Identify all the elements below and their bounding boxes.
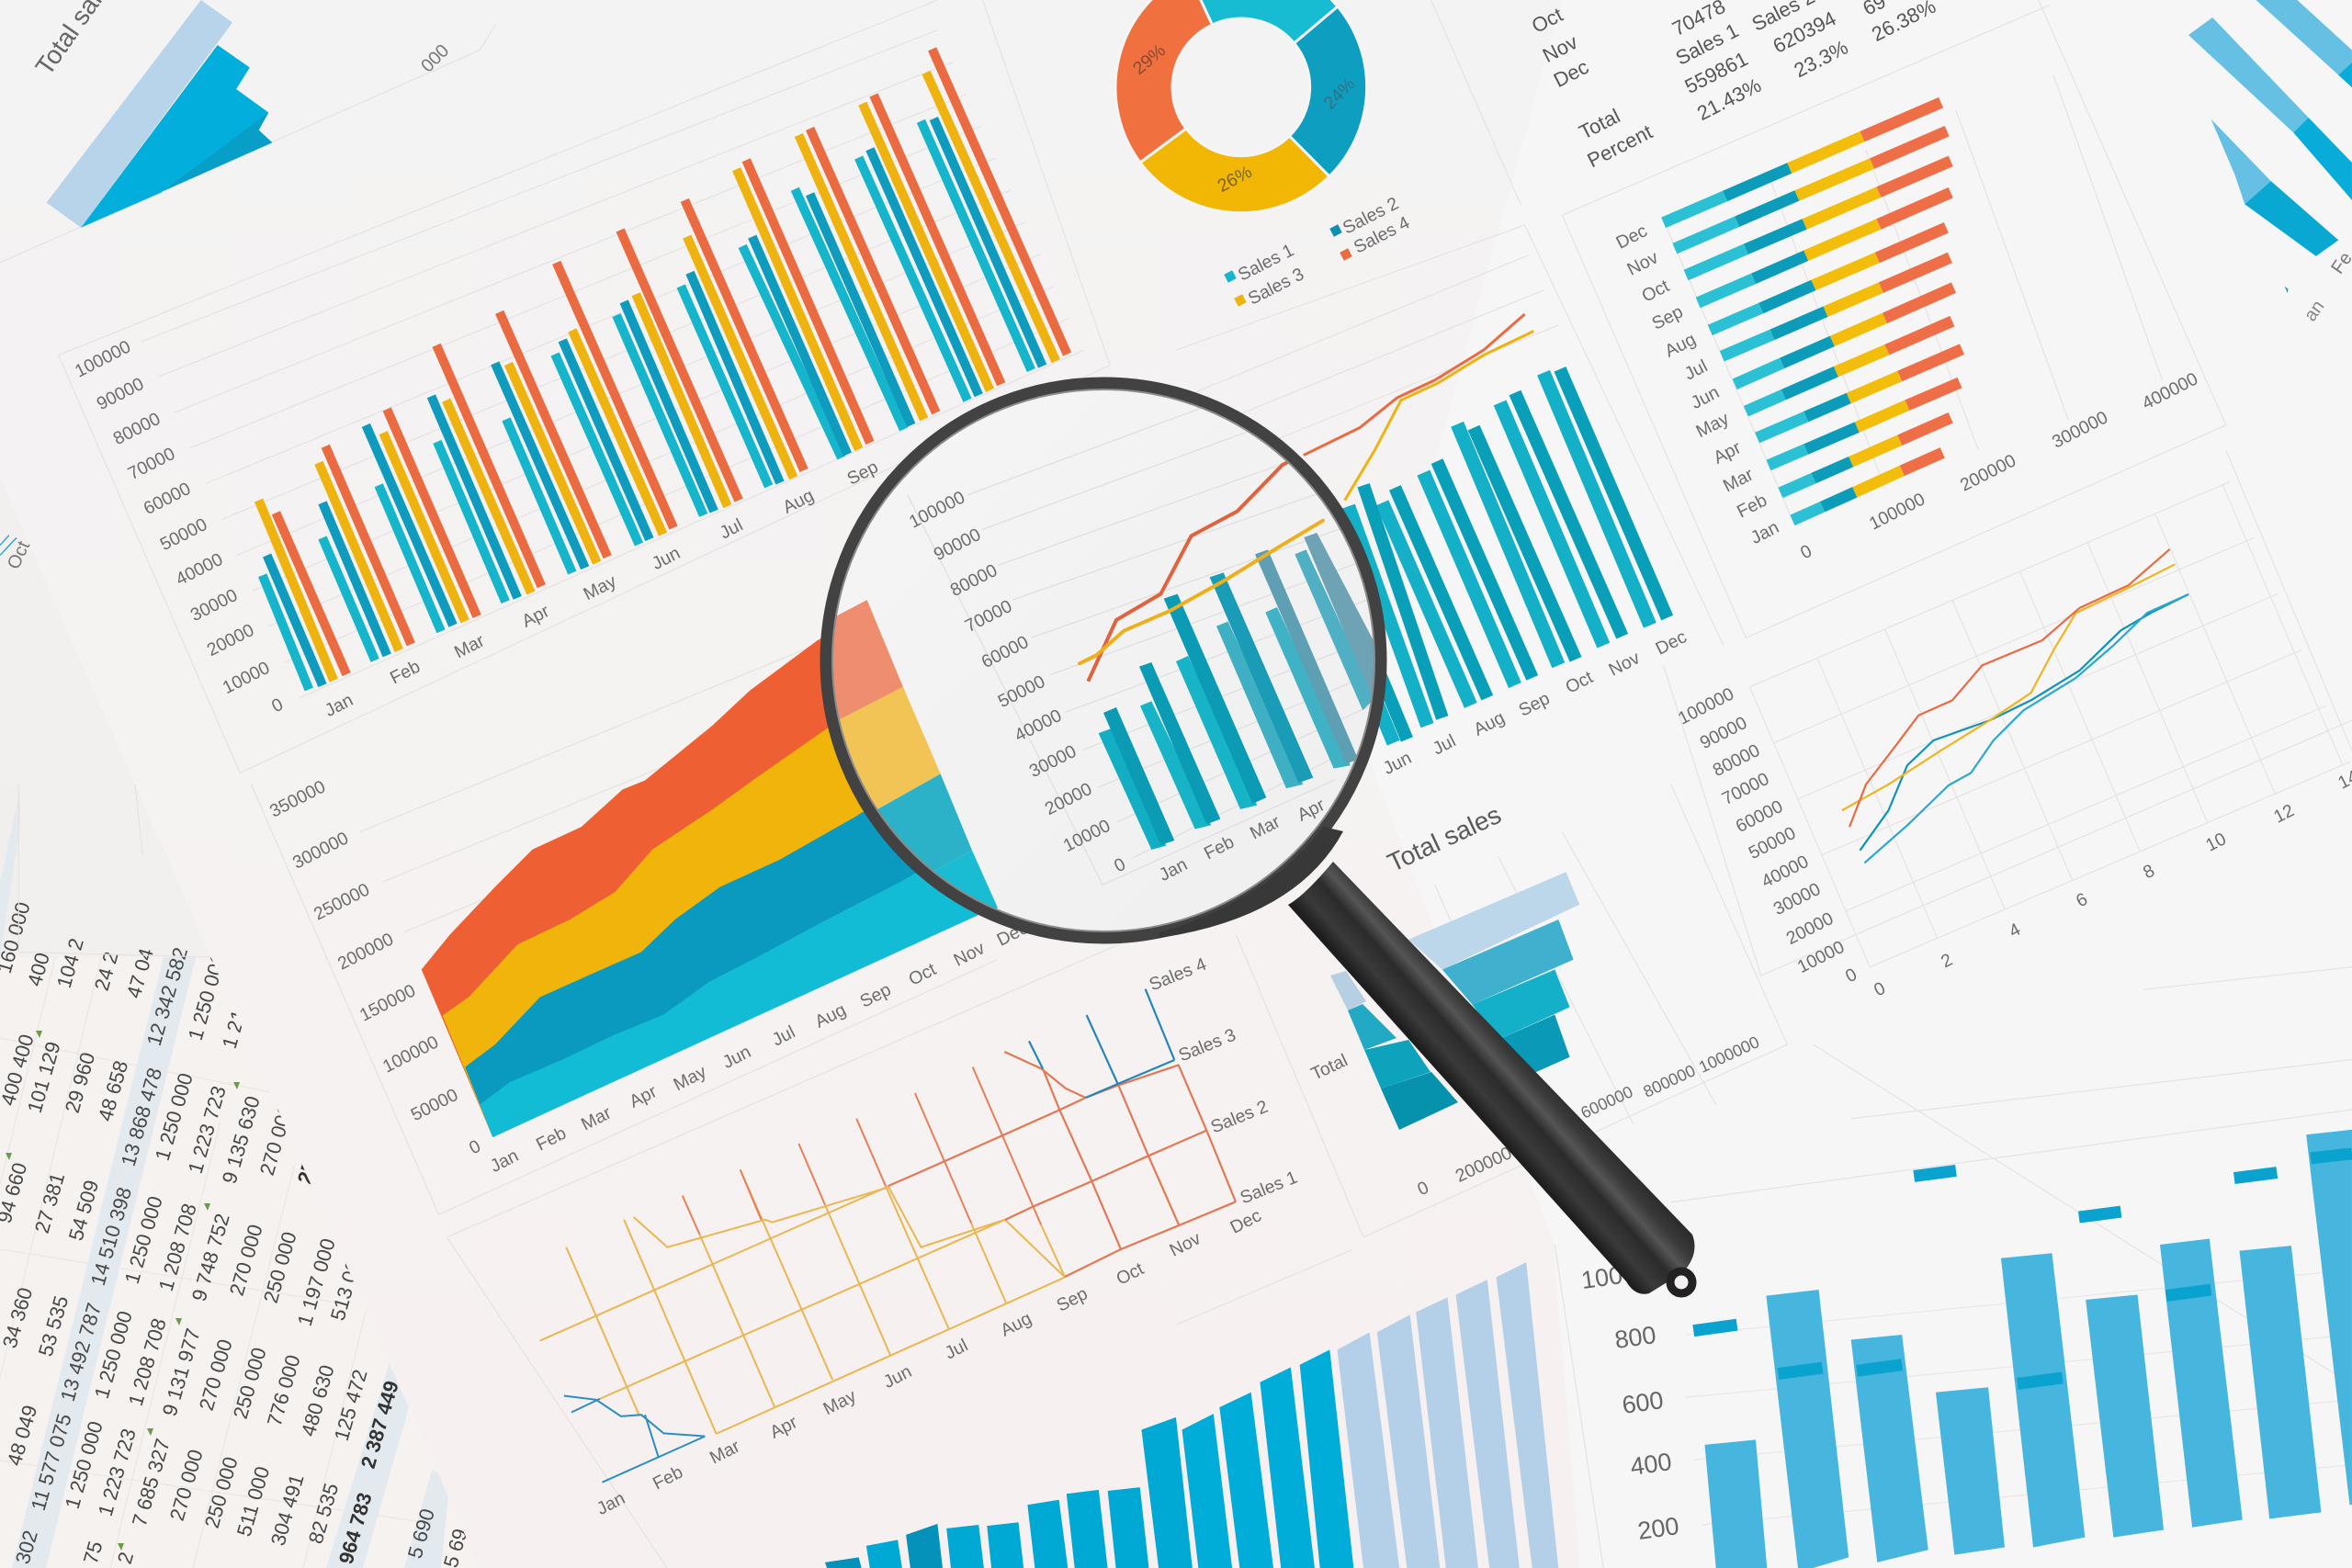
- chart: total sales horizontal bars: 200000: [1453, 1143, 1515, 1187]
- chart: line chart with numeric x axis: 40000: [1758, 852, 1812, 892]
- chart: line chart with numeric x axis: 100000: [1675, 683, 1737, 729]
- spreadsheet numbers: 9 748 752: [187, 1211, 234, 1303]
- chart: grid line chart sales 1-4: [540, 954, 1300, 1519]
- axis labels: Aug: [780, 485, 817, 518]
- chart axis fragment: 000: [417, 40, 453, 76]
- axis labels: 50000: [157, 514, 210, 555]
- chart: stacked area: Dec: [994, 918, 1032, 951]
- chart: grid line chart sales 1-4: Jul: [942, 1336, 971, 1363]
- spreadsheet numbers: 14 510 398: [86, 1185, 136, 1288]
- spreadsheet numbers: 75: [79, 1539, 107, 1566]
- axis labels: 70000: [125, 444, 178, 484]
- chart: stacked horizontal bars: Jul: [1681, 356, 1711, 384]
- handle collar: [1159, 827, 1343, 938]
- spreadsheet numbers: 1 223 723: [184, 1083, 231, 1176]
- axis labels: 20000: [204, 620, 257, 660]
- table: totals: Nov: [1539, 30, 1581, 67]
- table: totals: Total: [1576, 104, 1623, 144]
- lens axis labels: 100000: [906, 487, 968, 533]
- chart: line chart with numeric x axis: 80000: [1710, 740, 1763, 781]
- spreadsheet numbers: 1 250 000: [151, 1070, 198, 1163]
- panel: small partial chart on left sheet: [0, 536, 17, 556]
- table: totals: Percent: [1584, 120, 1656, 172]
- icon: magnifying glass: [808, 367, 1694, 1294]
- y axis labels: 600: [1621, 1386, 1665, 1419]
- lens axis labels: 20000: [1042, 779, 1095, 819]
- table: totals: Sales 1: [1672, 18, 1742, 70]
- legend: sales series: Sales 2: [1340, 193, 1402, 239]
- text: Oct label on left chart: Oct: [4, 537, 34, 572]
- chart: line chart with numeric x axis: 90000: [1697, 713, 1750, 753]
- chart: grid line chart sales 1-4: Nov: [1167, 1228, 1204, 1261]
- chart: stacked area: 150000: [356, 980, 419, 1026]
- chart: bars with lines (outside lens): Sep: [1516, 688, 1554, 721]
- axis labels: 40000: [173, 549, 226, 590]
- spreadsheet numbers: 270 000: [225, 1222, 267, 1298]
- lens view: [833, 397, 1374, 922]
- chart: top-left total sales fragment: [30, 0, 272, 228]
- chart: total sales horizontal bars: 600000: [1578, 1082, 1635, 1122]
- axis labels: Jan: [322, 690, 356, 721]
- target markers: [1693, 1154, 2352, 1383]
- chart: grid line chart sales 1-4: Sales 4: [1147, 954, 1209, 995]
- axis labels: Jun: [649, 543, 684, 574]
- spreadsheet numbers: 11 577 075: [27, 1411, 76, 1513]
- spreadsheet numbers: 400: [23, 950, 54, 988]
- chart: grid line chart sales 1-4: Feb: [650, 1462, 686, 1494]
- spreadsheet numbers: 48 049: [3, 1403, 41, 1468]
- y axis labels: 1000: [1579, 1259, 1638, 1294]
- spreadsheet numbers: 1 250 000: [120, 1193, 167, 1286]
- axis labels: Apr: [518, 601, 553, 632]
- chart: stacked area: Mar: [578, 1102, 615, 1134]
- spreadsheet numbers: 29 960: [61, 1050, 99, 1115]
- chart: line chart with numeric x axis: 8: [2140, 861, 2158, 883]
- spreadsheet numbers: 776 000: [263, 1352, 305, 1428]
- donut labels: 26%: [1215, 162, 1255, 197]
- spreadsheet numbers: 1 250 000: [184, 950, 231, 1043]
- chart: bars with lines (outside lens): Oct: [1562, 667, 1597, 698]
- spreadsheet numbers: 270 000: [255, 1101, 298, 1178]
- chart: total sales horizontal bars: 1000000: [1696, 1032, 1762, 1077]
- chart: total sales horizontal bars: 0: [1414, 1178, 1432, 1200]
- y axis labels: 200: [1636, 1512, 1680, 1545]
- lens area chart: [833, 600, 998, 908]
- chart: stacked horizontal bars: Oct: [1638, 276, 1673, 307]
- lens axis labels: Jan: [1156, 854, 1191, 886]
- axis labels: 30000: [187, 585, 241, 626]
- axis labels: 10000: [220, 658, 273, 698]
- spreadsheet numbers: 13 492 787: [56, 1301, 106, 1404]
- spreadsheet numbers: 304 491: [266, 1472, 309, 1548]
- legend: sales series: Sales 3: [1245, 264, 1307, 310]
- chart: line chart with numeric x axis: 2: [1938, 950, 1956, 972]
- chart: stacked area: 250000: [311, 879, 373, 925]
- panel: spreadsheet sheet: [0, 784, 480, 1568]
- chart: stacked area: 300000: [289, 828, 352, 874]
- axis labels: 100000: [72, 336, 134, 382]
- table: totals: Oct: [1528, 3, 1566, 38]
- handle shaft: [1288, 862, 1694, 1294]
- axis labels: Jul: [717, 515, 746, 543]
- axis labels: May: [581, 571, 620, 604]
- y axis labels: [1579, 1259, 1680, 1545]
- spreadsheet numbers: 101 129: [23, 1039, 65, 1115]
- spreadsheet numbers: 1 250 000: [61, 1418, 107, 1511]
- legend: sales series: [1224, 193, 1413, 310]
- chart: bottom right blue bars with markers: [1579, 1130, 2352, 1568]
- chart: bars with lines (outside lens): [1304, 314, 1690, 779]
- spreadsheet numbers: 5 690: [403, 1506, 439, 1561]
- lens axis labels: 10000: [1060, 816, 1114, 856]
- spreadsheet numbers: 964 783: [334, 1490, 377, 1566]
- chart: donut: [1115, 0, 1367, 213]
- spreadsheet numbers: 9 131 977: [158, 1325, 205, 1418]
- spreadsheet numbers: 270 000: [165, 1447, 208, 1523]
- chart: line chart with numeric x axis: 30000: [1770, 879, 1824, 919]
- spreadsheet numbers: 104 2: [52, 936, 88, 990]
- spreadsheet numbers: 24 2: [90, 949, 123, 993]
- spreadsheet numbers: 12 342 582: [142, 945, 192, 1048]
- legend: sales series: Sales 4: [1351, 212, 1413, 258]
- chart: stacked horizontal bars: Sep: [1649, 301, 1687, 334]
- handle loop: [1670, 1271, 1692, 1293]
- chart: grid line chart sales 1-4: Oct: [1113, 1258, 1148, 1290]
- spreadsheet numbers: 2: [113, 1550, 138, 1566]
- chart: grid line chart sales 1-4: Dec: [1227, 1205, 1265, 1238]
- table: totals: 21.43%: [1693, 73, 1765, 125]
- spreadsheet numbers: [0, 899, 472, 1568]
- lens axis labels: 60000: [978, 632, 1032, 672]
- chart: bars with lines (outside lens): Dec: [1653, 626, 1690, 660]
- chart: stacked area: 350000: [266, 776, 329, 822]
- chart: stacked horizontal bars: Nov: [1624, 247, 1662, 280]
- axis labels: 80000: [110, 409, 164, 449]
- panel: lighter sheet top right and bottom right: [1360, 0, 2352, 1568]
- y axis labels: 800: [1613, 1321, 1657, 1354]
- chart: stacked area: [266, 594, 1032, 1177]
- chart: stacked area: Apr: [626, 1081, 661, 1112]
- chart: stacked horizontal bars: Jun: [1688, 382, 1723, 413]
- chart: grid line chart sales 1-4: Apr: [766, 1412, 801, 1443]
- chart: stacked horizontal bars: 300000: [2049, 407, 2111, 453]
- spreadsheet numbers: 82 535: [304, 1481, 343, 1546]
- lens axis labels: 90000: [931, 525, 984, 565]
- chart: grid line chart sales 1-4: Mar: [707, 1436, 743, 1468]
- spreadsheet numbers: 511 000: [232, 1464, 274, 1539]
- chart: bottom centre cyan and pale bars: [825, 1262, 1558, 1568]
- chart: total sales horizontal bars: Total: [1308, 1050, 1351, 1085]
- chart: stacked area: Aug: [812, 999, 849, 1032]
- donut labels: [1129, 40, 1360, 197]
- spreadsheet numbers: 9 135 630: [218, 1093, 265, 1186]
- lens axis labels: 40000: [1012, 705, 1065, 746]
- spreadsheet numbers: 27 381: [30, 1170, 69, 1235]
- chart: line chart with numeric x axis: 60000: [1733, 796, 1786, 837]
- spreadsheet numbers: 13 868 478: [117, 1066, 166, 1168]
- chart: stacked horizontal bars: 0: [1797, 541, 1815, 563]
- spreadsheet numbers: 125 472: [330, 1367, 372, 1443]
- chart: total sales horizontal bars: [1308, 800, 1762, 1200]
- chart: stacked area: Feb: [533, 1123, 570, 1155]
- spreadsheet numbers: 250 000: [229, 1345, 271, 1421]
- donut labels: 24%: [1319, 73, 1360, 114]
- table: totals: Dec: [1550, 55, 1592, 92]
- chart: stacked area: Nov: [951, 938, 989, 971]
- spreadsheet numbers: 250 000: [200, 1454, 243, 1530]
- chart: stacked horizontal bars: Mar: [1720, 464, 1757, 496]
- chart: line chart with numeric x axis: 6: [2073, 889, 2091, 911]
- chart: line chart with numeric x axis: [1675, 549, 2352, 1000]
- lens axis labels: 0: [1111, 854, 1129, 876]
- legend: sales series: Sales 1: [1235, 240, 1297, 286]
- spreadsheet numbers: 53 535: [34, 1293, 73, 1359]
- chart: stacked area: Jul: [769, 1022, 798, 1050]
- chart: stacked area: 50000: [408, 1085, 461, 1125]
- table: totals: 23.3%: [1791, 36, 1851, 82]
- chart: stacked area: 0: [466, 1136, 484, 1158]
- spreadsheet numbers: 513 00: [326, 1258, 365, 1323]
- spreadsheet numbers: 7 685 327: [128, 1436, 175, 1529]
- chart: bars with lines (outside lens): Aug: [1471, 707, 1508, 740]
- axis labels: 90000: [94, 374, 147, 414]
- chart: grid line chart sales 1-4: Sep: [1054, 1283, 1091, 1316]
- chart: line chart with numeric x axis: 70000: [1719, 769, 1772, 809]
- table: totals: 620394: [1770, 6, 1839, 58]
- chart: monthly clustered bars: [72, 49, 1068, 721]
- chart: grid line chart sales 1-4: Jan: [594, 1488, 628, 1519]
- lens ring: [826, 383, 1381, 938]
- spreadsheet numbers: 25: [293, 1158, 322, 1186]
- spreadsheet numbers: 1 250 000: [90, 1308, 137, 1401]
- spreadsheet numbers: 1 223 723: [94, 1426, 141, 1518]
- chart: stacked horizontal bars: Apr: [1710, 437, 1745, 468]
- chart: stacked horizontal bars: May: [1693, 409, 1733, 442]
- chart: stacked area: Sep: [857, 979, 895, 1012]
- chart: bars with lines (outside lens): Nov: [1606, 648, 1644, 681]
- lens axis labels: 70000: [962, 596, 1015, 637]
- spreadsheet numbers: 1 197 000: [293, 1235, 340, 1328]
- lens axis labels: 50000: [995, 671, 1048, 712]
- axis labels: Mar: [451, 630, 488, 662]
- lens axis labels: Feb: [1201, 832, 1238, 863]
- chart: line chart with numeric x axis: 12: [2270, 800, 2298, 828]
- chart: stacked area: May: [671, 1062, 710, 1095]
- axis labels: Sep: [844, 457, 882, 490]
- heading: total sales: Total sales: [1383, 800, 1506, 877]
- chart: grid line chart sales 1-4: Jun: [880, 1361, 915, 1393]
- lens axis labels: Mar: [1247, 811, 1283, 843]
- spreadsheet numbers: 270 000: [195, 1337, 237, 1413]
- chart: line chart with numeric x axis: 10: [2202, 829, 2230, 856]
- spreadsheet numbers: 48 658: [94, 1058, 132, 1123]
- table: totals: 559861: [1681, 47, 1751, 98]
- spreadsheet numbers: 1 208 708: [154, 1201, 201, 1293]
- chart: stacked horizontal bars: Aug: [1662, 329, 1699, 362]
- chart: stacked horizontal bars: 400000: [2139, 368, 2201, 414]
- spreadsheet numbers: 47 04: [122, 946, 158, 1000]
- chart: stacked area: Oct: [905, 959, 940, 990]
- chart: grid line chart sales 1-4: May: [820, 1386, 860, 1419]
- chart: stacked area: Jun: [719, 1042, 754, 1073]
- spreadsheet numbers: 1 216: [218, 997, 254, 1051]
- chart: stacked horizontal bars: [1613, 103, 2201, 563]
- upper right of grid chart: [888, 989, 1236, 1277]
- chart: line chart with numeric x axis: 50000: [1746, 823, 1799, 863]
- axis labels: [72, 336, 882, 721]
- lens axis labels: [906, 487, 1329, 886]
- chart: line chart with numeric x axis: 0: [1842, 964, 1860, 987]
- axis labels: Feb: [387, 657, 424, 688]
- chart: grid line chart sales 1-4: Sales 2: [1208, 1097, 1271, 1137]
- spreadsheet numbers: 1 208 708: [124, 1315, 171, 1408]
- lens bars and lines: [1080, 446, 1381, 850]
- table: totals: [1528, 0, 1939, 172]
- lens axis labels: 30000: [1026, 741, 1080, 782]
- y axis labels: 400: [1629, 1448, 1673, 1481]
- spreadsheet numbers: 250 000: [259, 1229, 301, 1305]
- chart: stacked horizontal bars: Feb: [1734, 491, 1770, 522]
- chart: total sales horizontal bars: 800000: [1641, 1061, 1698, 1101]
- chart: line chart with numeric x axis: 0: [1871, 978, 1889, 1000]
- chart: line chart with numeric x axis: 10000: [1794, 937, 1848, 977]
- chart: bars with lines (outside lens): Jul: [1430, 731, 1459, 759]
- lens axis labels: 80000: [947, 560, 1001, 601]
- spreadsheet numbers: 2 387 449: [356, 1378, 403, 1471]
- spreadsheet numbers: 480 630: [297, 1362, 339, 1438]
- chart: top-right blue bars fragment: [2188, 0, 2352, 325]
- chart: bars with lines (outside lens): Jun: [1380, 748, 1415, 779]
- chart: line chart with numeric x axis: 20000: [1783, 908, 1837, 949]
- chart: stacked horizontal bars: 100000: [1866, 489, 1928, 535]
- chart: stacked horizontal bars: Jan: [1747, 517, 1782, 548]
- spreadsheet numbers: 54 509: [64, 1178, 103, 1243]
- spreadsheet numbers: 302: [11, 1528, 42, 1566]
- chart: grid line chart sales 1-4: Sales 3: [1176, 1025, 1238, 1066]
- axis labels: 0: [268, 694, 287, 716]
- chart: stacked area: 200000: [334, 929, 397, 975]
- chart: grid line chart sales 1-4: Sales 1: [1238, 1168, 1300, 1208]
- axis labels: 60000: [141, 479, 194, 519]
- lens axis labels: Apr: [1294, 795, 1329, 826]
- chart: grid line chart sales 1-4: Aug: [998, 1308, 1035, 1341]
- chart: stacked area: 100000: [379, 1032, 442, 1077]
- chart: stacked horizontal bars: Dec: [1613, 220, 1651, 254]
- chart: top-right blue bars fragment: an: [2301, 297, 2328, 325]
- chart: line chart with numeric x axis: 4: [2006, 919, 2024, 942]
- donut labels: 29%: [1129, 40, 1170, 79]
- chart: stacked horizontal bars: 200000: [1957, 450, 2019, 496]
- chart: stacked area: Jan: [487, 1145, 522, 1177]
